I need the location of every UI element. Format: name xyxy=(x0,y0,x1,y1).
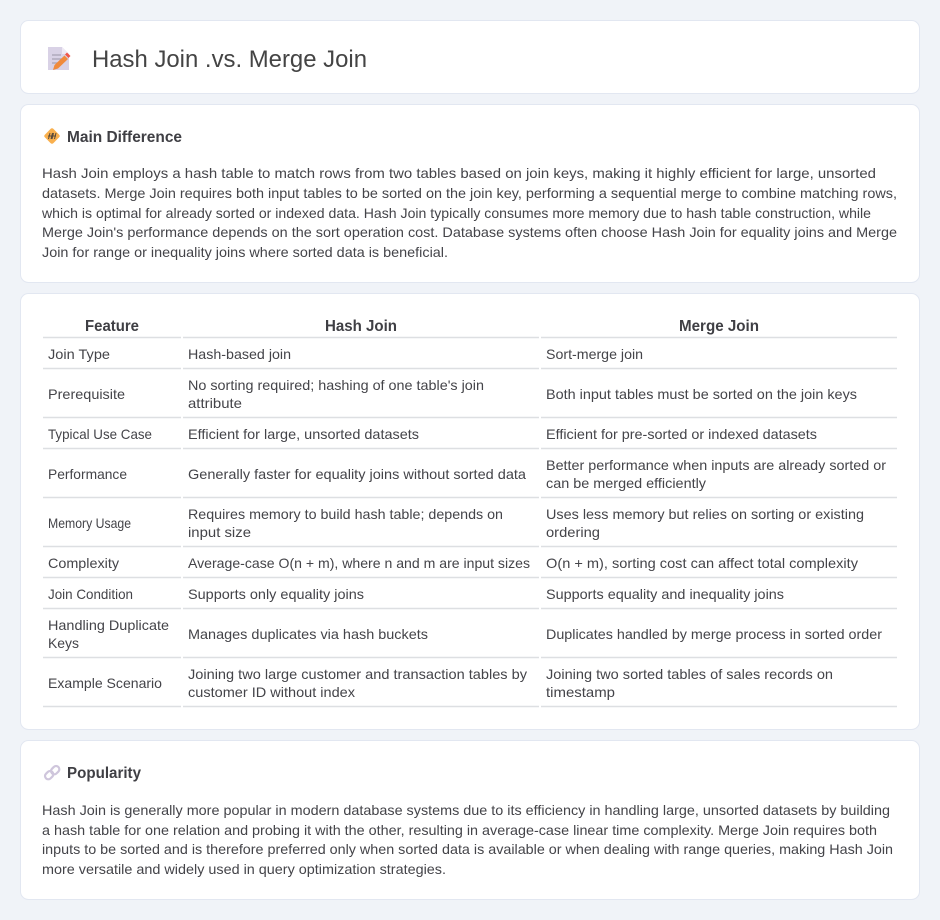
row: performance: can be merged efficiently xyxy=(546,475,706,491)
row: example scenario: timestamp xyxy=(546,684,615,700)
row: handling duplicate keys: Manages duplicates via hash buckets xyxy=(188,626,428,642)
row: performance: Generally faster for equality joins without sorted data xyxy=(188,466,526,482)
text block: main difference paragraph: Hash Join employs a hash table to match rows from two tables based on join keys, making it highly efficient for large, unsorted xyxy=(42,165,876,181)
row: example scenario: Joining two large customer and transaction tables by xyxy=(188,666,527,682)
row: handling duplicate keys: Keys xyxy=(48,635,79,651)
icon: orange diamond xyxy=(44,128,60,144)
row: prerequisite xyxy=(48,377,857,411)
row: memory usage: Memory Usage xyxy=(48,515,131,531)
heading: popularity: Popularity xyxy=(67,765,141,782)
text block: main difference paragraph: Join for range or inequality joins where sorted data is beneficial. xyxy=(42,244,448,260)
text block: main difference paragraph: Merge Join's performance depends on the sort operation cost. Database systems often choose Hash Join for equality joins and Merge xyxy=(42,224,897,240)
row: join type: Join Type xyxy=(48,346,110,362)
row: typical use case: Typical Use Case xyxy=(48,426,152,442)
panel: header xyxy=(20,20,920,94)
title: Hash Join .vs. Merge Join xyxy=(92,46,367,73)
row: prerequisite: attribute xyxy=(188,395,242,411)
heading: main difference: Main Difference xyxy=(67,129,182,146)
row: prerequisite: Both input tables must be sorted on the join keys xyxy=(546,386,857,402)
table header row xyxy=(85,318,759,335)
panel: comparison table xyxy=(20,294,920,730)
icon: document with pencil xyxy=(48,47,70,70)
row: typical use case: Efficient for large, unsorted datasets xyxy=(188,426,419,442)
table header row: Hash Join xyxy=(325,318,397,335)
row: complexity: O(n + m), sorting cost can affect total complexity xyxy=(546,555,858,571)
row: performance: Better performance when inputs are already sorted or xyxy=(546,457,886,473)
row: join condition xyxy=(48,586,784,602)
row: memory usage: Requires memory to build hash table; depends on xyxy=(188,506,503,522)
row: join condition: Join Condition xyxy=(48,586,133,602)
row: memory usage xyxy=(48,506,864,540)
row: performance xyxy=(48,457,886,491)
row: handling duplicate keys: Handling Duplicate xyxy=(48,617,169,633)
row: example scenario: Example Scenario xyxy=(48,675,162,691)
text block: main difference paragraph: which is optimal for already sorted or indexed data. Hash Join typically consumes more memory due to hash table construction, while xyxy=(41,205,871,221)
row: complexity xyxy=(48,555,858,571)
text block: popularity paragraph xyxy=(42,802,893,877)
row: prerequisite: Prerequisite xyxy=(48,386,125,402)
row: handling duplicate keys: Duplicates handled by merge process in sorted order xyxy=(546,626,882,642)
text block: popularity paragraph: Hash Join is generally more popular in modern database systems due to its efficiency in handling large, unsorted datasets by building xyxy=(42,802,890,818)
row: join type xyxy=(48,346,643,362)
row: complexity: Average-case O(n + m), where n and m are input sizes xyxy=(188,555,530,571)
row: complexity: Complexity xyxy=(48,555,119,571)
row: prerequisite: No sorting required; hashing of one table's join xyxy=(188,377,484,393)
row: performance: Performance xyxy=(48,466,127,482)
row: memory usage: input size xyxy=(188,524,251,540)
text block: main difference paragraph: datasets. Merge Join requires both input tables to be sorted on the join key, performing a sequential merge to combine matching rows, xyxy=(42,185,897,201)
text block: main difference paragraph xyxy=(41,165,897,260)
text block: popularity paragraph: inputs to be sorted and is therefore preferred only when sorted data is available or when dealing with range queries, making Hash Join xyxy=(42,841,893,857)
text block: popularity paragraph: a hash table for one relation and probing it with the other, resulting in average-case linear time complexity. Merge Join requires both xyxy=(42,822,877,838)
panel: popularity xyxy=(20,740,920,900)
row: memory usage: ordering xyxy=(546,524,600,540)
row: example scenario xyxy=(48,666,833,700)
row: typical use case xyxy=(48,426,817,442)
row: join condition: Supports only equality joins xyxy=(188,586,364,602)
table header row: Feature xyxy=(85,318,139,335)
panel: main difference xyxy=(20,104,920,282)
row: example scenario: customer ID without index xyxy=(188,684,355,700)
row: join condition: Supports equality and inequality joins xyxy=(546,586,784,602)
row: join type: Hash-based join xyxy=(188,346,291,362)
row: typical use case: Efficient for pre-sorted or indexed datasets xyxy=(546,426,817,442)
row: join type: Sort-merge join xyxy=(546,346,643,362)
table header row: Merge Join xyxy=(679,318,759,335)
row: handling duplicate keys xyxy=(48,617,882,651)
row: memory usage: Uses less memory but relies on sorting or existing xyxy=(546,506,864,522)
icon: chain link xyxy=(44,765,61,781)
text block: popularity paragraph: more versatile and widely used in query optimization strategies. xyxy=(42,861,446,877)
row: example scenario: Joining two sorted tables of sales records on xyxy=(546,666,833,682)
